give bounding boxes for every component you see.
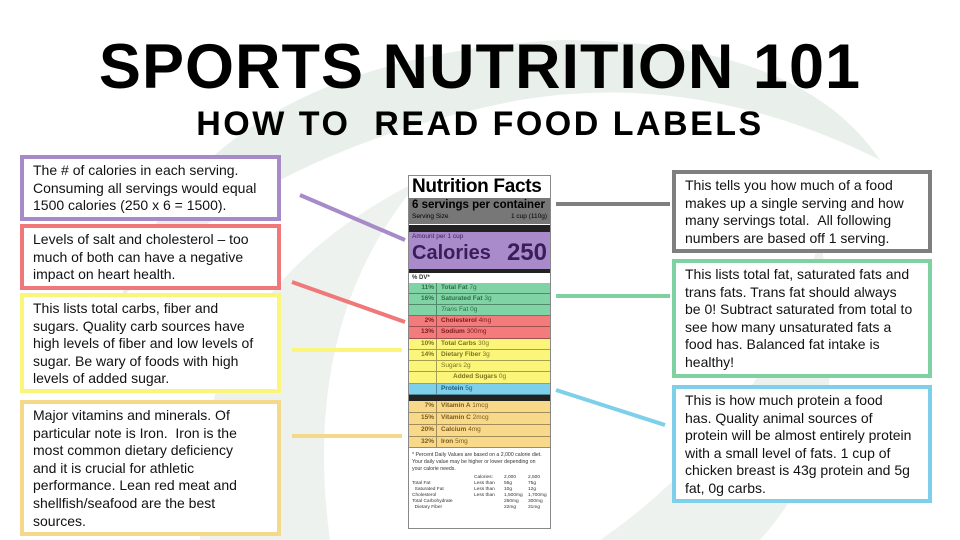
- callout: salt and cholesterol: impact on heart health.: [33, 266, 175, 282]
- callout: vitamins: sources.: [33, 513, 86, 529]
- nutrition facts label: Dietary Fiber: [415, 505, 442, 510]
- nutrition facts label: Saturated Fat 3g: [441, 295, 492, 302]
- nutrition facts label: Amount per 1 cup: [412, 233, 463, 240]
- callout: protein: This is how much protein a food: [685, 392, 883, 408]
- nutrition facts label: 55g: [504, 481, 512, 486]
- nutrition facts label: Total Carbohydrate: [412, 499, 453, 504]
- nutrition facts label: 10%: [421, 340, 434, 347]
- callout: protein: has. Quality animal sources of: [685, 410, 873, 426]
- nutrition facts label: Trans Fat 0g: [441, 306, 477, 313]
- callout: salt and cholesterol: [20, 224, 281, 290]
- nutrition facts label: 2,000: [504, 475, 516, 480]
- nutrition facts label: 20%: [421, 426, 434, 433]
- callout: carbs: levels of added sugar.: [33, 370, 169, 386]
- callout: protein: [672, 385, 932, 503]
- callout: carbs: high levels of fiber and low levels of: [33, 335, 253, 351]
- nutrition facts label: Less than: [474, 487, 495, 492]
- nutrition facts label: 12g: [528, 487, 536, 492]
- callout: servings: This tells you how much of a food: [685, 177, 893, 193]
- nutrition facts label: Total Fat: [412, 481, 430, 486]
- nutrition facts label: Sugars 2g: [441, 362, 471, 369]
- callout: vitamins: and it is crucial for athletic: [33, 460, 194, 476]
- nutrition facts label: 250: [507, 239, 547, 266]
- nutrition facts label: Saturated Fat: [415, 487, 444, 492]
- nutrition facts label: 16%: [421, 295, 434, 302]
- callout: protein: with a small level of fats. 1 cup of: [685, 445, 890, 461]
- nutrition facts label: Calories:: [474, 475, 493, 480]
- callout: carbs: This lists total carbs, fiber and: [33, 300, 218, 316]
- callout: vitamins: most common dietary deficiency: [33, 442, 233, 458]
- nutrition facts label: Total Carbs 30g: [441, 340, 489, 347]
- callout: fats: food has. Balanced fat intake is: [685, 336, 880, 352]
- nutrition facts label: 13%: [421, 328, 434, 335]
- nutrition facts label: 31mg: [528, 505, 540, 510]
- nutrition facts label: Serving Size: [412, 213, 448, 220]
- nutrition facts label: 10g: [504, 487, 512, 492]
- callout: calories: Consuming all servings would equal: [33, 180, 256, 196]
- nutrition facts label: * Percent Daily Values are based on a 2,000 calorie diet. Your daily value may be higher or lower depending on your calorie needs.: [412, 452, 542, 472]
- nutrition facts label: % DV*: [412, 275, 430, 281]
- nutrition facts label: 250mg: [504, 499, 519, 504]
- callout: fats: trans fats. Trans fat should always: [685, 284, 897, 300]
- nutrition facts label: Dietary Fiber 3g: [441, 351, 490, 358]
- nutrition facts label: Calories: [412, 242, 491, 264]
- nutrition facts label: 6 servings per container: [412, 199, 545, 211]
- nutrition facts label: Nutrition Facts: [412, 176, 542, 197]
- nutrition facts label: 1,500mg: [504, 493, 523, 498]
- nutrition facts label: Less than: [474, 493, 495, 498]
- callout: vitamins: shellfish/seafood are the best: [33, 495, 215, 511]
- nutrition facts label: 2,500: [528, 475, 540, 480]
- nutrition facts label: Cholesterol: [412, 493, 436, 498]
- callout: fats: This lists total fat, saturated fats and: [685, 266, 909, 282]
- callout: vitamins: [20, 400, 281, 536]
- callout: fats: be 0! Subtract saturated from total to: [685, 301, 912, 317]
- callout: calories: 1500 calories (250 x 6 = 1500).: [33, 197, 226, 213]
- callout: calories: [20, 155, 281, 221]
- callout: carbs: [20, 293, 281, 393]
- nutrition facts label: 32%: [421, 438, 434, 445]
- nutrition facts label: 1,700mg: [528, 493, 547, 498]
- nutrition facts label: 15%: [421, 414, 434, 421]
- callout: salt and cholesterol: much of both can have a negative: [33, 249, 243, 265]
- title: SPORTS NUTRITION 101: [99, 32, 861, 102]
- nutrition facts label: Protein 5g: [441, 385, 472, 392]
- nutrition facts label: Added Sugars 0g: [453, 373, 506, 380]
- nutrition facts label: Iron 5mg: [441, 438, 468, 445]
- callout: protein: protein will be almost entirely protein: [685, 427, 911, 443]
- callout: servings: makes up a single serving and how: [685, 195, 904, 211]
- nutrition facts label: Vitamin C 2mcg: [441, 414, 489, 421]
- callout: vitamins: performance. Lean red meat and: [33, 477, 237, 493]
- callout: fats: [672, 259, 932, 378]
- nutrition facts label: Total Fat 7g: [441, 284, 477, 291]
- callout: servings: [672, 170, 932, 253]
- nutrition facts label: 300mg: [528, 499, 543, 504]
- callout: calories: The # of calories in each serving.: [33, 162, 238, 178]
- callout: protein: chicken breast is 43g protein and 5g: [685, 462, 910, 478]
- callout: fats: see how many unsaturated fats a: [685, 319, 891, 335]
- nutrition facts label: 75g: [528, 481, 536, 486]
- nutrition facts label: 22mg: [504, 505, 516, 510]
- callout: carbs: sugars. Quality carb sources have: [33, 318, 245, 334]
- callout: vitamins: Major vitamins and minerals. Of: [33, 407, 230, 423]
- callout: servings: many servings total. All following: [685, 212, 891, 228]
- nutrition facts label: 7%: [425, 402, 434, 409]
- callout: carbs: sugar. Be wary of foods with high: [33, 353, 238, 369]
- nutrition facts label: 14%: [421, 351, 434, 358]
- callout: servings: numbers are based off 1 serving.: [685, 230, 889, 246]
- nutrition facts label: Cholesterol 4mg: [441, 317, 491, 324]
- callout: salt and cholesterol: Levels of salt and cholesterol – too: [33, 231, 249, 247]
- subtitle: HOW TO READ FOOD LABELS: [196, 105, 764, 143]
- callout: vitamins: particular note is Iron. Iron is the: [33, 425, 237, 441]
- nutrition facts label: 2%: [425, 317, 434, 324]
- nutrition facts label: Sodium 300mg: [441, 328, 487, 335]
- nutrition facts label: 11%: [421, 284, 434, 291]
- nutrition facts label: Calcium 4mg: [441, 426, 481, 433]
- callout: fats: healthy!: [685, 354, 734, 370]
- nutrition facts label: Less than: [474, 481, 495, 486]
- nutrition facts label: 1 cup (110g): [511, 213, 547, 220]
- callout: protein: fat, 0g carbs.: [685, 480, 766, 496]
- nutrition facts label: [408, 175, 551, 529]
- nutrition facts label: Vitamin A 1mcg: [441, 402, 488, 409]
